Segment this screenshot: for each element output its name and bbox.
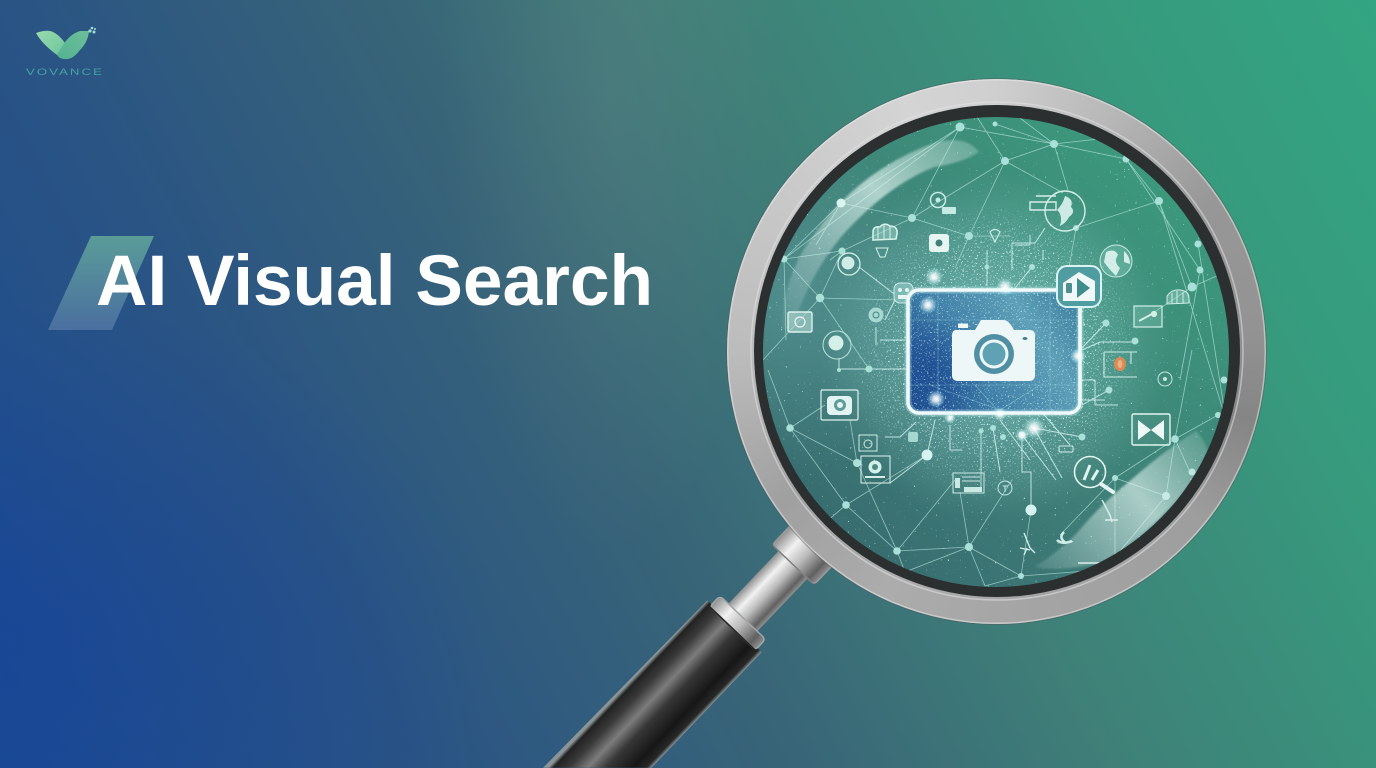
highlight: bottom-right lens glare: [1034, 431, 1208, 569]
circuit lines: [839, 228, 1135, 510]
icon: camera box: [821, 390, 858, 420]
icon: small circle: [998, 481, 1012, 495]
sparkle glints: [919, 268, 1086, 442]
particle field: [760, 115, 1240, 590]
icon: round badge: [838, 253, 860, 275]
lens outer bright rim: [751, 102, 1243, 600]
icon: small tile: [894, 283, 913, 303]
icon: pin: [868, 308, 884, 322]
icon: blob badge: [823, 331, 851, 359]
icon: server cloud: [873, 224, 897, 257]
logo: Vovance: [26, 26, 104, 78]
icon: camera box two: [861, 456, 890, 483]
icon: magnifier: [1074, 456, 1113, 492]
network nodes: [780, 122, 1228, 579]
dark lens bezel: [754, 105, 1240, 597]
icon: photo box: [788, 312, 812, 332]
highlight: top-left lens glare: [782, 140, 979, 330]
icon: pill: [1059, 446, 1073, 452]
icon: small tile dot: [908, 432, 918, 442]
icon: map pin: [990, 230, 1000, 242]
icon: camera: [952, 320, 1035, 381]
icon: fast-forward box: [1132, 414, 1170, 445]
icon: image box: [1134, 306, 1162, 327]
icon: cloud right: [1167, 290, 1189, 304]
network lines: [763, 117, 1240, 586]
lens glass: [760, 115, 1240, 590]
magnifying glass: [543, 78, 1267, 768]
icon: tile: [929, 234, 949, 252]
icon: orange target box: [1104, 352, 1137, 377]
icon: small ring: [1158, 372, 1172, 386]
icon: small photo box: [859, 435, 877, 451]
logo: Vovance: VOVANCE: [26, 67, 104, 78]
lens contents: [750, 102, 1244, 601]
icon: video badge: [1057, 266, 1101, 307]
icon: globe with card: [1030, 191, 1085, 231]
bottom glyph marks: [1020, 500, 1118, 563]
title block with accent parallelogram: AI Visual Search: [96, 242, 653, 321]
icon: gears: [930, 192, 956, 214]
icon: document: [953, 473, 984, 493]
icon: globe: [1100, 245, 1132, 277]
magnifier metal ring: [727, 79, 1266, 624]
central camera frame: [908, 290, 1080, 413]
